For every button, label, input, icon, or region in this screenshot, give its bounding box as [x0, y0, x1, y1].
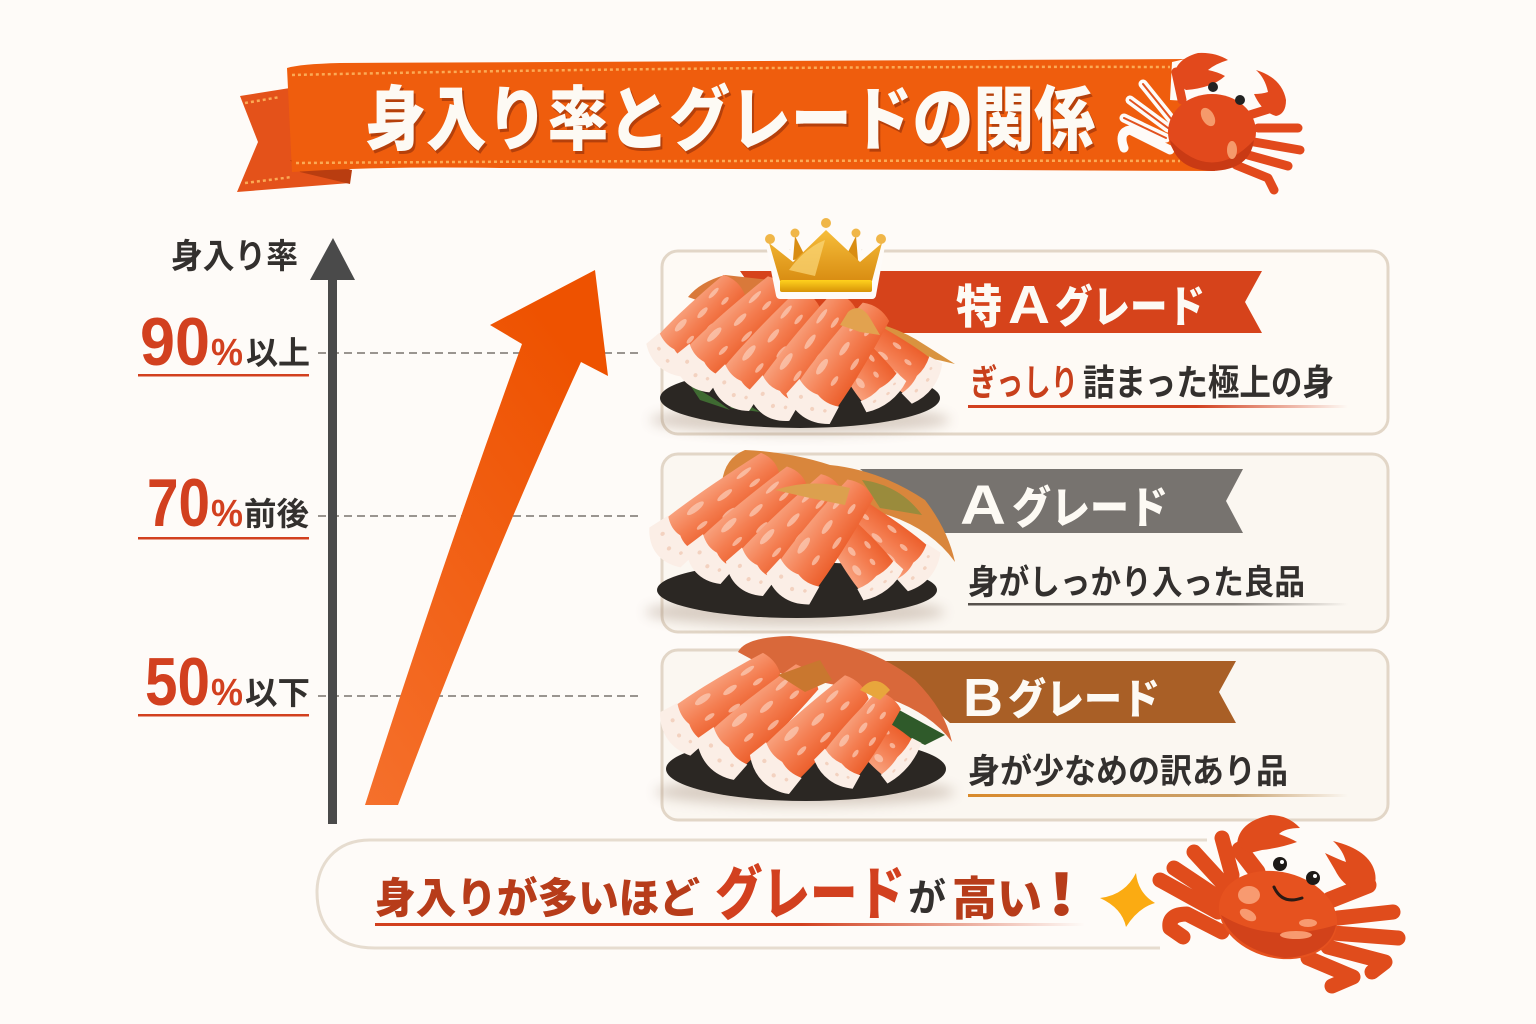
callout text: is higher: 高い — [952, 863, 1042, 929]
description: A: 身がしっかり入った良品 — [968, 563, 1305, 602]
label: about 70%: 前後 — [244, 496, 309, 532]
label: 50% or less: 50 — [145, 644, 210, 720]
label: 50% or less: % — [211, 672, 243, 714]
title text: 身入り率とグレードの関係 — [367, 67, 1097, 168]
axis label: 身入り率 — [171, 238, 298, 276]
description: special A — [968, 362, 1348, 408]
grade name: A — [960, 472, 1168, 536]
icon: sparkle — [1100, 873, 1155, 927]
icon: header crab — [1122, 50, 1300, 190]
icon: vertical axis arrow — [310, 238, 355, 824]
label: 50% or less — [138, 644, 310, 720]
grade name: A: A — [960, 473, 1006, 536]
dashed guide lines — [318, 353, 642, 696]
grade name: A: グレード — [1012, 472, 1168, 536]
icon: mascot crab — [1160, 815, 1398, 986]
panel: B grade — [662, 650, 1388, 820]
description: B: 身が少なめの訳あり品 — [968, 752, 1288, 791]
label: 50% or less: 以下 — [245, 675, 310, 711]
ribbon: special A grade — [740, 271, 1262, 333]
callout text: particle: が — [908, 878, 946, 920]
label: about 70% — [138, 465, 309, 541]
growth arrow — [365, 270, 608, 805]
banner body — [287, 59, 1215, 172]
icon: crown — [765, 218, 886, 295]
label: 90% or more: 90 — [140, 304, 210, 380]
label: about 70%: 70 — [147, 465, 210, 541]
grade name: special A: 特 — [956, 271, 1002, 337]
callout text: more meat: 身入りが多いほど — [375, 865, 700, 926]
label: 90% or more: 以上 — [246, 335, 310, 371]
ribbon: A grade — [860, 469, 1243, 533]
description: special A: 詰まった極上の身 — [1083, 362, 1334, 403]
grade name: special A — [956, 271, 1205, 337]
title banner — [237, 59, 1215, 192]
description: special A: ぎっしり — [970, 362, 1078, 403]
grade name: B: グレード — [1008, 666, 1160, 727]
crab plate: special A — [641, 266, 955, 434]
grade name: special A: A — [1008, 275, 1050, 335]
panel: special A grade — [662, 251, 1388, 434]
label: 90% or more — [138, 304, 310, 380]
banner fold — [290, 160, 352, 184]
conclusion callout — [317, 840, 1207, 948]
ribbon: B grade — [880, 661, 1236, 723]
label: about 70%: % — [211, 493, 243, 535]
title text: 身入り率とグレードの関係 — [365, 64, 1095, 165]
crab plate: B — [652, 636, 955, 806]
callout text: grade: グレード — [715, 847, 905, 931]
crab plate: A — [641, 442, 955, 626]
grade name: B: B — [963, 668, 1003, 728]
callout text: is higher: ! — [1048, 851, 1075, 932]
callout text: is higher — [952, 851, 1075, 932]
label: 90% or more: % — [211, 332, 243, 374]
banner tail — [237, 88, 350, 192]
panel: A grade — [662, 454, 1388, 632]
grade name: special A: グレード — [1055, 271, 1205, 335]
